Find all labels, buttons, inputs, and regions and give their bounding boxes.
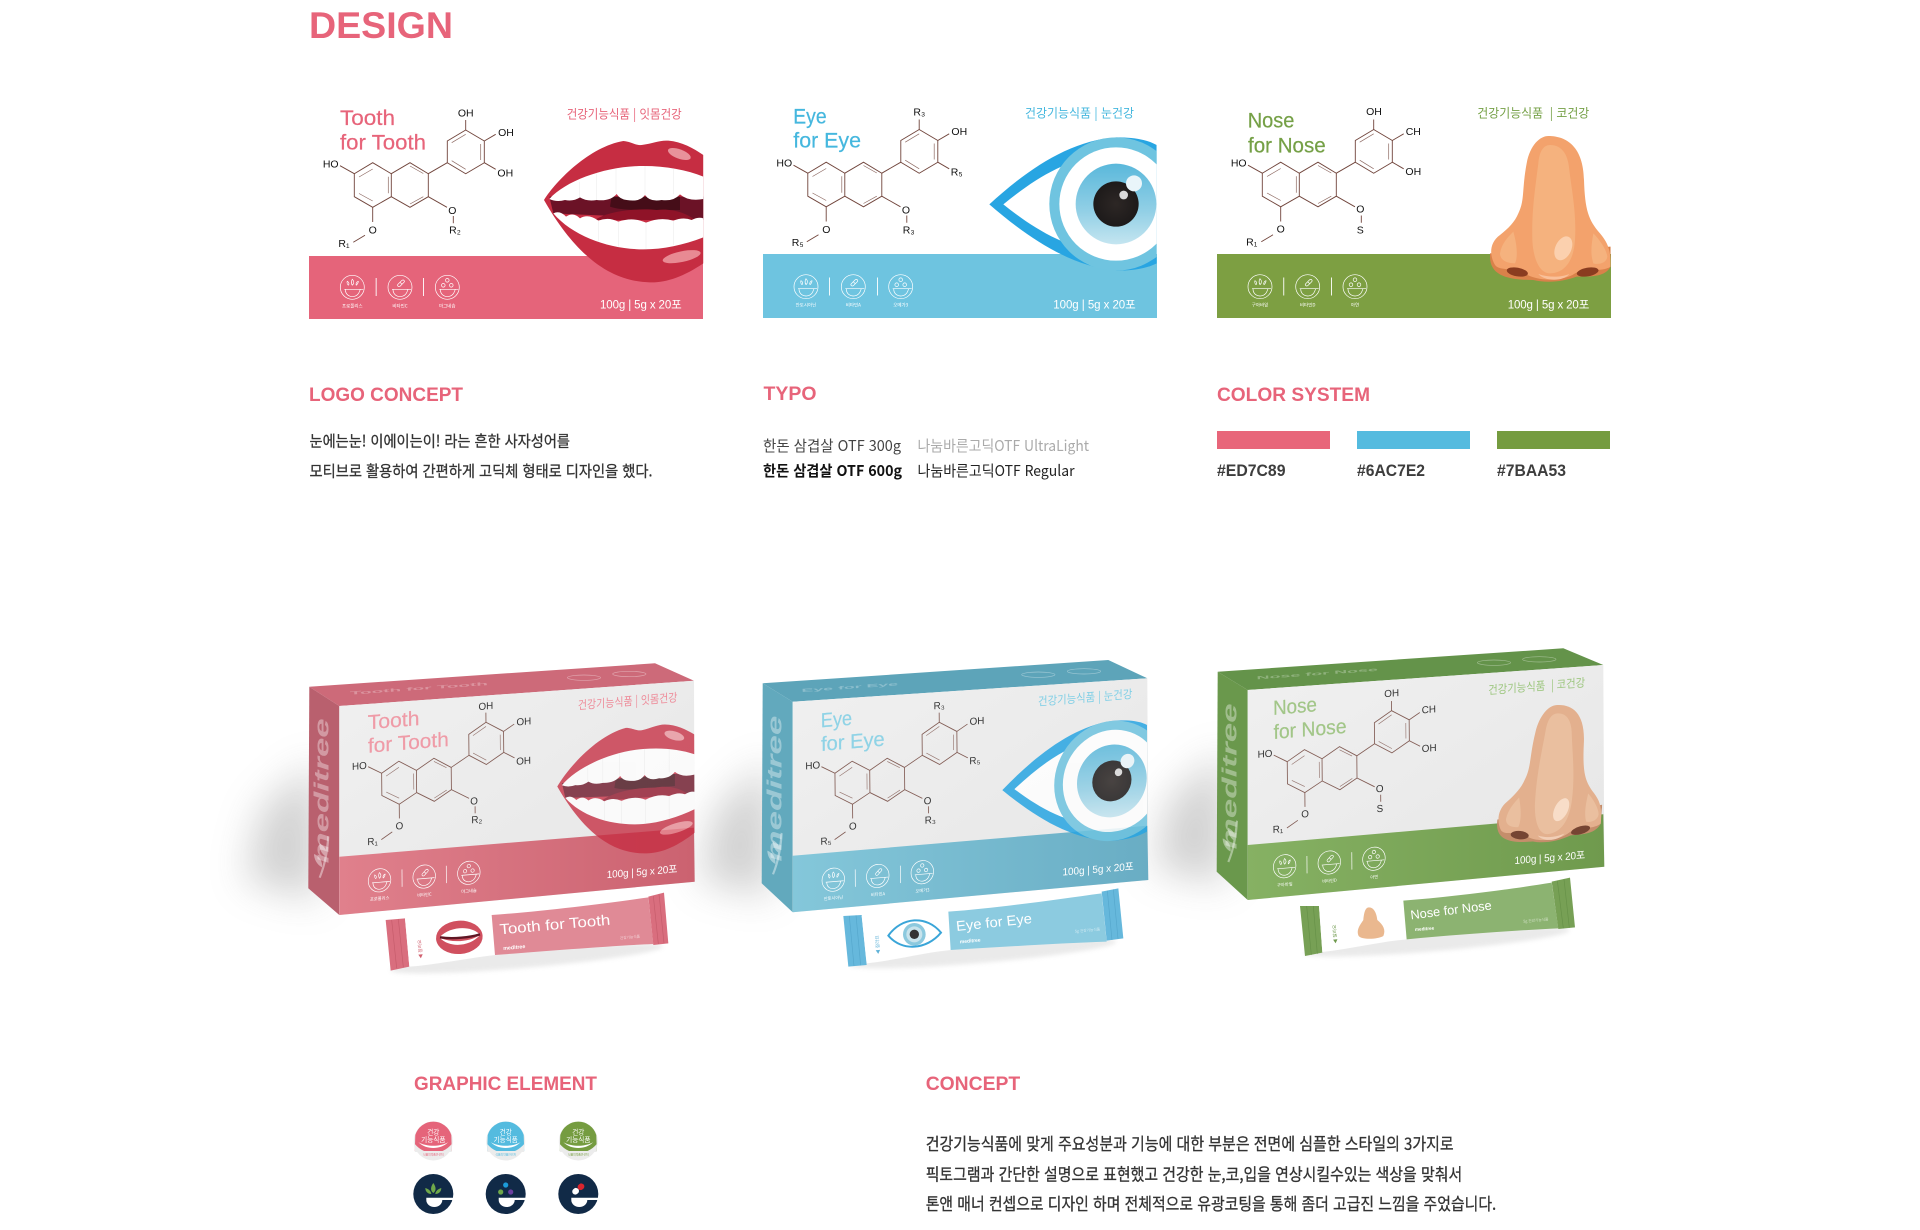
badge: green health-food seal [559,1122,598,1160]
molecule and front print: OH [1384,688,1399,700]
product name [793,105,861,153]
typography samples: 한돈 삼겹살 OTF 300g [763,435,902,456]
box top and side print [312,671,646,878]
color swatches: #ED7C89 [1217,462,1286,480]
right side print [1038,686,1134,881]
molecule labels [776,107,967,249]
color swatches [1217,431,1610,480]
package mockup: red stick pouch [386,893,668,980]
badge: blue health-food seal: 건강 [500,1126,512,1136]
pictogram icons [1248,275,1367,309]
pictogram icons: 비타민C [392,303,408,310]
molecule and front print: R₁ [1273,824,1284,836]
package mockup: blue box [762,660,1170,912]
molecule [340,120,496,242]
illustration: nose [1490,136,1611,282]
package mockup: red stick pouch: ◀ 잘라요 [416,939,425,959]
molecule labels: S [1357,224,1364,236]
molecule and front print: for Eye [821,728,885,756]
band [763,254,1157,318]
box faces [762,660,1148,912]
package mockup: blue stick pouch [843,888,1123,974]
band [309,256,703,319]
molecule and front print: 구아바잎 [1277,880,1293,889]
package mockup: green stick pouch [1300,878,1575,963]
molecule and front print: 비타민A [871,890,885,898]
shadow: green box [1154,750,1226,884]
molecule and front print: R₅ [969,755,981,767]
molecule labels: HO [776,158,792,170]
molecule and front print [1257,684,1438,890]
molecule and front print: for Tooth [368,729,449,758]
panel: Nose for Nose flat design [1217,102,1611,318]
text block: logo concept: 눈에는눈! 이에이는이! 라는 흔한 사자성어를 [310,430,570,452]
text block: concept: 건강기능식품에 맞게 주요성분과 기능에 대한 부분은 전면에 심플한 스타일의 3가지로 [926,1130,1454,1155]
pictogram icons [794,275,913,309]
text block: concept: 픽토그램과 간단한 설명으로 표현했고 건강한 눈,코,입을 연상시킬수있는 색상을 맞춰서 [926,1160,1462,1186]
package mockup: green stick pouch: ◀ 잘라요 [1331,924,1339,944]
molecule and front print: R₃ [934,700,945,712]
molecule labels: O [902,204,910,216]
product name: for Eye [793,130,861,153]
molecule and front print: 비타민C [417,891,432,899]
molecule and front print [805,696,986,904]
molecule and front print: 마그네슘 [461,887,477,895]
text block: logo concept: 모티브로 활용하여 간편하게 고딕체 형태로 디자인을 했다. [310,460,652,482]
molecule and front print: Tooth [368,708,420,734]
molecule labels: R₃ [913,107,925,119]
package mockup: red stick pouch: 건강기능식품 [620,934,641,941]
molecule labels [323,108,514,250]
molecule and front print: HO [1258,749,1273,761]
package mockup: green box [1217,648,1610,900]
weight label: 100g | 5g x 20포 [1508,299,1589,311]
molecule and front print: HO [352,761,367,773]
molecule labels: R₅ [951,167,963,179]
badge: blue health-food seal: 식품의약품안전처 [495,1152,516,1156]
molecule and front print: 아연 [1370,873,1378,881]
package mockup: blue stick pouch: ◀ 잘라요 [873,934,882,954]
category label: 건강기능식품 | 잇몸건강 [567,103,682,122]
heading: concept: CONCEPT [926,1073,1020,1095]
illustration: eye on box [1002,720,1148,841]
molecule labels: HO [1231,158,1247,170]
right side print: 건강기능식품 | 잇몸건강 [578,689,678,714]
molecule labels [1231,106,1421,249]
pictogram icons: 아연 [1351,302,1359,309]
category label: 건강기능식품 | 코건강 [1477,102,1590,121]
panel: Eye for Eye flat design [763,102,1183,318]
badge: red health-food seal: 건강 [427,1126,439,1136]
molecule and front print: for Nose [1273,716,1347,744]
molecule and front print: OH [1422,743,1437,755]
product name: Tooth [340,107,395,130]
illustration: eye [989,137,1183,271]
badge: blue health-food seal [486,1122,525,1160]
molecule and front print: 오메가3 [915,886,930,895]
badge: red health-food seal: 기능식품 [421,1134,445,1144]
typography samples: 한돈 삼겹살 OTF 600g [763,460,902,481]
badge: green health-food seal: 건강 [572,1126,584,1136]
right side print: 100g | 5g x 20포 [607,864,677,881]
molecule labels: CH [1406,126,1421,138]
heading: logo concept: LOGO CONCEPT [309,384,463,406]
molecule and front print: OH [478,701,493,713]
pictogram icons: 마그네슘 [439,303,456,310]
molecule labels: R₁ [1246,237,1258,249]
molecule labels: O [822,224,830,236]
molecule and front print: O [1301,809,1309,821]
molecule and front print: CH [1422,704,1436,717]
band [1217,254,1611,318]
molecule labels: OH [1405,166,1421,178]
molecule labels: R₅ [792,237,804,249]
package mockup: blue stick pouch: Eye for Eye [955,910,1033,934]
heading: color system: COLOR SYSTEM [1217,384,1370,406]
molecule labels: R₃ [903,224,915,236]
box top and side print [764,669,1101,875]
illustration: nose on box [1497,705,1602,842]
pictogram icons: 구아바잎 [1252,302,1268,309]
package mockup: green stick pouch: 5g 건강기능식품 [1523,916,1549,925]
right side print [578,689,678,883]
box top and side print: Tooth for Tooth [350,681,489,696]
typography samples [763,435,1089,481]
pictogram icons: 프로폴리스 [342,303,363,310]
panel: Tooth for Tooth flat design [309,103,703,319]
molecule labels: R₂ [449,224,461,236]
badge: green health-food seal: 식품의약품안전처 [568,1152,589,1156]
icon: navy bowl with capsule [558,1174,599,1214]
package mockup: green stick pouch: Nose for Nose [1410,898,1492,922]
box faces [1217,648,1604,900]
molecule and front print: Nose [1273,694,1317,720]
molecule labels: O [1277,223,1285,235]
molecule and front print: OH [516,716,531,729]
package mockup: blue stick pouch: meditree [960,938,981,945]
right side print: 건강기능식품 | 눈건강 [1038,686,1133,710]
molecule and front print: R₂ [471,814,482,826]
pictogram icons: 안토시아닌 [796,302,816,309]
molecule and front print: S [1377,804,1384,815]
molecule and front print: 프로폴리스 [370,894,389,903]
category label: 건강기능식품 | 눈건강 [1025,102,1134,121]
illustration: mouth on box [557,722,695,861]
product name: Eye [793,105,827,128]
title: DESIGN [309,5,453,46]
text block: concept: 톤앤 매너 컨셉으로 디자인 하며 전체적으로 유광코팅을 통해 좀더 고급진 느낌을 주었습니다. [926,1190,1496,1215]
molecule labels: OH [497,168,513,180]
product name: for Tooth [340,131,426,154]
badge: red health-food seal: 식품의약품안전처 [423,1152,444,1156]
text block: logo concept [310,430,652,482]
molecule labels: R₁ [338,238,350,250]
typography samples: 나눔바른고딕OTF UltraLight [918,435,1089,456]
right side print [1488,674,1586,869]
product name [1248,110,1326,158]
box top and side print [1219,657,1556,862]
right side print: 100g | 5g x 20포 [1063,862,1134,879]
molecule and front print: O [849,821,857,833]
box faces [308,663,695,915]
molecule and front print: 안토시아닌 [824,894,843,902]
color swatches: #6AC7E2 [1357,462,1425,480]
pictogram icons [340,275,459,310]
product name: for Nose [1248,135,1326,158]
shadow: blue box [700,760,771,896]
package mockup: red stick pouch: meditree [503,944,526,952]
pictogram icons: 비타민A [846,302,861,309]
box top and side print: Eye for Eye [801,682,898,693]
right side print: 100g | 5g x 20포 [1515,850,1585,867]
product name: Nose [1248,110,1294,133]
box top and side print: Nose for Nose [1256,667,1378,681]
molecule labels: OH [498,127,514,139]
weight label: 100g | 5g x 20포 [600,299,682,311]
box top and side print: meditree [764,716,786,862]
package mockup: red box [308,663,695,915]
molecule and front print: O [1376,784,1384,795]
heading: typo: TYPO [764,383,816,405]
molecule labels: OH [458,108,474,120]
molecule and front print: 비타민D [1322,877,1337,885]
typography samples: 나눔바른고딕OTF Regular [918,460,1075,481]
molecule and front print: Eye [821,708,852,732]
heading: graphic element: GRAPHIC ELEMENT [414,1073,597,1095]
package mockup: blue stick pouch: 5g 건강기능식품 [1075,926,1101,935]
molecule labels: O [448,205,456,217]
weight label: 100g | 5g x 20포 [1053,299,1136,311]
molecule and front print [351,698,533,904]
molecule labels: OH [951,126,967,138]
pictogram icons: 오메가3 [893,302,909,309]
molecule and front print: O [470,796,478,808]
molecule and front print: HO [805,760,820,773]
illustration: mouth [544,141,703,282]
badge: red health-food seal [414,1122,453,1160]
molecule labels: HO [323,159,339,171]
right side print: 건강기능식품 | 코건강 [1488,674,1586,698]
text block: concept [926,1130,1496,1215]
package mockup: red stick pouch: Tooth for Tooth [499,913,611,938]
product name [340,107,426,154]
box top and side print: meditree [312,718,334,863]
shadow: red box [246,760,318,900]
molecule labels: O [369,224,377,236]
molecule [1248,120,1404,242]
molecule and front print: O [396,821,404,833]
box top and side print: meditree [1219,703,1241,849]
pictogram icons: 비타민D [1300,302,1315,309]
icon: navy bowl with dots [486,1174,527,1214]
molecule and front print: R₁ [367,836,378,848]
molecule and front print: R₅ [820,836,832,848]
badge: green health-food seal: 기능식품 [566,1134,590,1144]
molecule and front print: O [924,796,932,808]
molecule and front print: OH [970,716,984,728]
icon: navy bowl with leaves [413,1174,454,1214]
badge: blue health-food seal: 기능식품 [494,1134,518,1144]
molecule labels: OH [1366,106,1382,118]
molecule [794,120,949,242]
molecule labels: O [1356,204,1364,216]
package mockup: green stick pouch: meditree [1415,926,1435,932]
color swatches: #7BAA53 [1497,462,1566,480]
molecule and front print: OH [516,756,531,768]
molecule and front print: R₃ [925,815,936,827]
